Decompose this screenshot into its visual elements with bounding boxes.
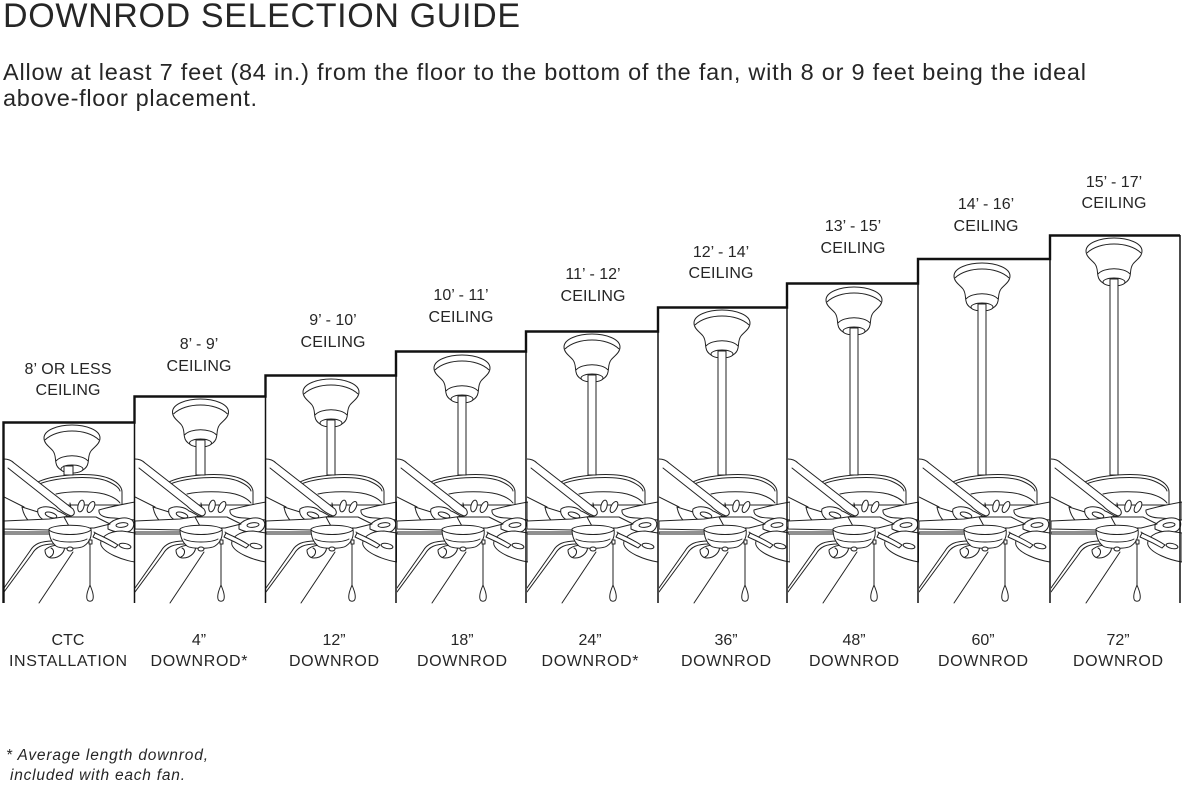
- label: ceiling: CEILING: [954, 218, 1018, 235]
- label: downrod: DOWNROD: [289, 653, 379, 670]
- fan: 12 inch downrod: [266, 379, 397, 603]
- label: 15-17: 15’ - 17’: [1086, 174, 1142, 191]
- label: downrod: DOWNROD*: [542, 653, 638, 670]
- fan illustrations: [4, 238, 1182, 603]
- label: 12 inch: 12”: [322, 632, 346, 649]
- label: downrod: DOWNROD*: [150, 653, 248, 670]
- label: downrod: DOWNROD: [938, 653, 1028, 670]
- label: 48 inch: 48”: [842, 632, 866, 649]
- label: 10-11: 10’ - 11’: [433, 287, 489, 304]
- label: 60 inch: 60”: [971, 632, 995, 649]
- label: ceiling: CEILING: [300, 334, 366, 351]
- label: downrod: DOWNROD: [681, 653, 771, 670]
- stepped ceiling outline: [4, 235, 1180, 603]
- label: 11-12: 11’ - 12’: [565, 266, 621, 283]
- label: 12-14: 12’ - 14’: [693, 244, 749, 261]
- intro text: above-floor placement.: [3, 85, 257, 111]
- footnote: included with each fan.: [10, 767, 185, 784]
- label: CTC: CTC: [52, 632, 84, 649]
- label: 18 inch: 18”: [450, 632, 474, 649]
- label: 13-15: 13’ - 15’: [825, 218, 881, 235]
- label: downrod: DOWNROD: [809, 653, 899, 670]
- label: ceiling: CEILING: [166, 358, 232, 375]
- label: 24 inch: 24”: [578, 632, 602, 649]
- label: 9-10: 9’ - 10’: [309, 312, 357, 329]
- fan: 60 inch downrod: [919, 263, 1050, 603]
- label: ceiling: CEILING: [688, 265, 754, 282]
- label: 36 inch: 36”: [714, 632, 738, 649]
- label: ceiling: CEILING: [820, 240, 886, 257]
- fan: 4 inch downrod: [135, 399, 266, 603]
- fan: 36 inch downrod: [659, 310, 790, 603]
- fan: 48 inch downrod: [788, 287, 919, 603]
- label: 14-16: 14’ - 16’: [958, 196, 1014, 213]
- downrod length labels: [9, 632, 1163, 670]
- label: 8-9: 8’ - 9’: [180, 336, 218, 353]
- label: 8 or less: 8’ OR LESS: [24, 361, 112, 378]
- label: ceiling: CEILING: [36, 382, 100, 399]
- intro text: [3, 59, 1086, 111]
- label: ceiling: CEILING: [1082, 195, 1146, 212]
- label: ceiling: CEILING: [428, 309, 494, 326]
- fan: CTC installation: [4, 425, 135, 603]
- footnote: * Average length downrod,: [6, 747, 208, 764]
- fan: 24 inch downrod: [527, 334, 658, 603]
- ceiling height labels: [24, 174, 1146, 399]
- label: 4 inch: 4”: [192, 632, 206, 649]
- label: downrod: DOWNROD: [417, 653, 507, 670]
- label: downrod: DOWNROD: [1073, 653, 1163, 670]
- label: 72 inch: 72”: [1106, 632, 1130, 649]
- label: installation: INSTALLATION: [9, 653, 127, 670]
- footnote: [6, 747, 208, 784]
- fan: 72 inch downrod: [1051, 238, 1182, 603]
- fan: 18 inch downrod: [397, 355, 528, 603]
- intro text: Allow at least 7 feet (84 in.) from the floor to the bottom of the fan, with 8 or 9 feet being the ideal: [3, 59, 1086, 85]
- label: ceiling: CEILING: [560, 288, 626, 305]
